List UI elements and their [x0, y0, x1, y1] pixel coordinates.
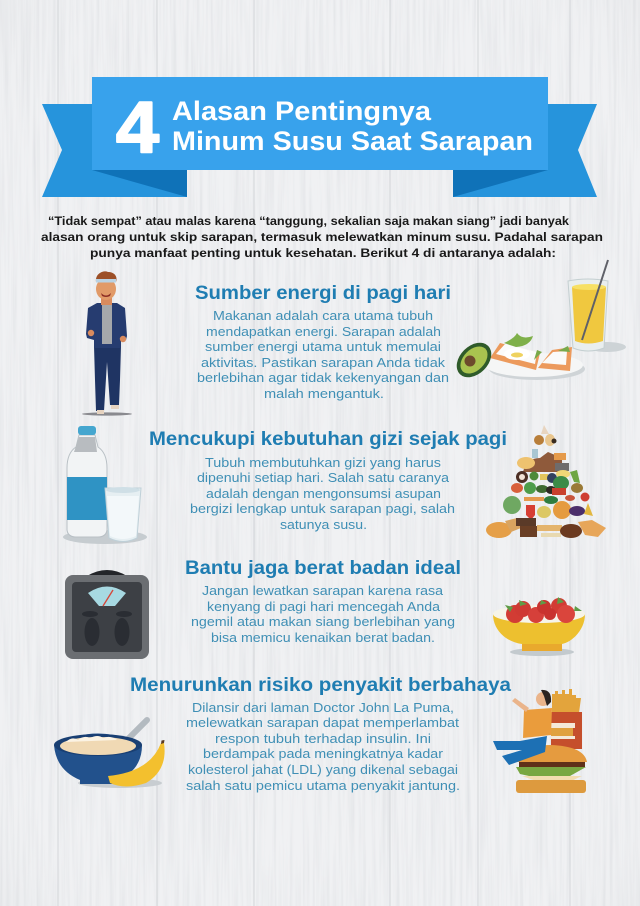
body text: malah mengantuk. [264, 387, 384, 401]
title text: Alasan Pentingnya [172, 96, 432, 126]
icon: bowl of strawberries [493, 597, 585, 656]
body text: berlebihan agar tidak kekenyangan dan [197, 371, 449, 385]
body text: kenyang di pagi hari mencegah Anda [207, 600, 440, 614]
body text: respon tubuh terhadap insulin. Ini [215, 732, 431, 746]
banner main panel [92, 77, 548, 170]
tier 1: sweets [534, 435, 544, 445]
big number 4: 4 [116, 88, 159, 168]
icon: glass of juice [568, 260, 626, 352]
icon: bathroom scale [65, 570, 149, 659]
tier 5: grains [486, 522, 512, 538]
body text: adalah dengan mengonsumsi asupan [206, 487, 441, 501]
avocado [450, 336, 498, 384]
icon: food pyramid [486, 425, 606, 538]
body text: Dilansir dari laman Doctor John La Puma, [192, 701, 454, 715]
person [493, 736, 547, 765]
icon: milk bottle and glass [63, 426, 147, 544]
title text: Minum Susu Saat Sarapan [172, 126, 533, 156]
section 1: energy [195, 283, 451, 401]
body text: sumber energi utama untuk memulai [205, 340, 441, 354]
icon: oatmeal bowl and banana [54, 720, 165, 788]
title banner [42, 77, 597, 197]
body text: satunya susu. [280, 518, 367, 532]
tier 4: vegetables [503, 496, 521, 514]
section 3: weight [185, 558, 461, 645]
footprints [84, 618, 100, 646]
body text: Tubuh membutuhkan gizi yang harus [205, 456, 441, 470]
heading: Mencukupi kebutuhan gizi sejak pagi [149, 429, 507, 450]
icon: man in tracksuit [82, 271, 132, 416]
body text: kolesterol jahat (LDL) yang dikenal sebagai [188, 763, 458, 777]
burger [515, 745, 587, 762]
right ribbon tail [453, 104, 597, 197]
intro paragraph: punya manfaat penting untuk kesehatan. Berikut 4 di antaranya adalah: [90, 246, 556, 260]
section 4: disease risk [130, 675, 511, 793]
body text: aktivitas. Pastikan sarapan Anda tidak [201, 356, 446, 370]
body text: salah satu pemicu utama penyakit jantung. [186, 779, 460, 793]
tier 3: fruit and veg [516, 471, 528, 483]
icon: toast plate and avocado [450, 333, 585, 384]
left ribbon tail [42, 104, 187, 197]
icon: man on burger with fries [493, 689, 587, 793]
intro paragraph: alasan orang untuk skip sarapan, termasuk melewatkan minum susu. Padahal sarapan [41, 230, 603, 244]
heading: Bantu jaga berat badan ideal [185, 558, 461, 579]
body text: Makanan adalah cara utama tubuh [213, 309, 433, 323]
body text: melewatkan sarapan dapat memperlambat [186, 716, 460, 730]
heading: Menurunkan risiko penyakit berbahaya [130, 675, 511, 696]
body text: dipenuhi setiap hari. Salah satu caranya [197, 471, 449, 485]
body text: bisa memicu kenaikan berat badan. [211, 631, 435, 645]
fries [552, 689, 581, 713]
intro paragraph: “Tidak sempat” atau malas karena “tanggung, sekalian saja makan siang” jadi banyak [48, 214, 569, 228]
ribbon folds [92, 170, 548, 197]
body text: bergizi lengkap untuk sarapan pagi, salah [190, 502, 455, 516]
body text: Jangan lewatkan sarapan karena rasa [202, 584, 443, 598]
body text: mendapatkan energi. Sarapan adalah [206, 325, 441, 339]
section 2: nutrition [149, 429, 507, 532]
body text: berdampak pada meningkatnya kadar [203, 747, 443, 761]
body text: ngemil atau makan siang berlebihan yang [191, 615, 455, 629]
heading: Sumber energi di pagi hari [195, 283, 451, 304]
tier 2: protein [532, 449, 538, 458]
